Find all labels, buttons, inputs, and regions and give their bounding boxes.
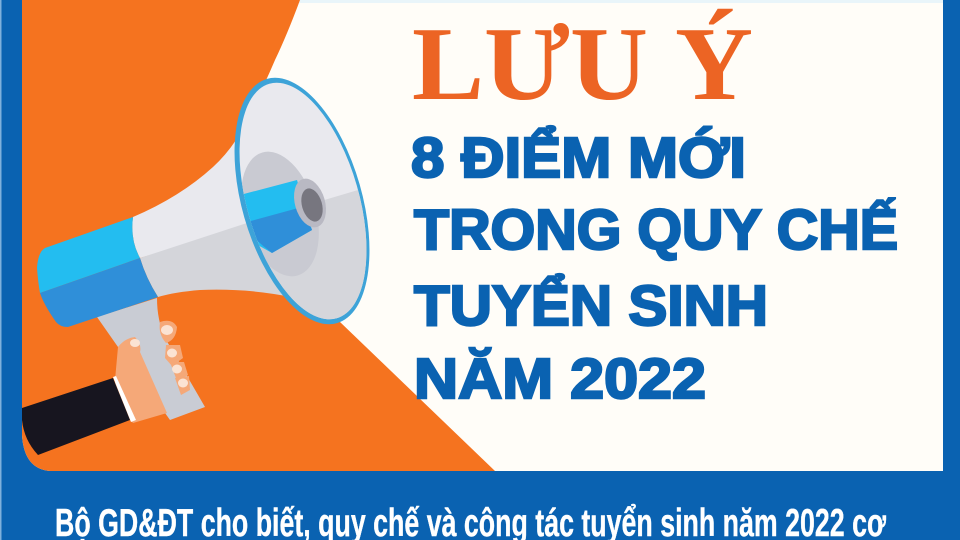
heading: 8 ĐIỂM MỚI: 8 ĐIỂM MỚI — [411, 125, 746, 190]
handle — [97, 298, 205, 420]
title: LƯU Ý: LƯU Ý — [412, 5, 753, 122]
hand — [115, 321, 190, 423]
megaphone rim and interior — [234, 78, 370, 324]
sleeve — [22, 376, 136, 455]
icon: megaphone with hand — [22, 78, 370, 455]
panel: orange speech beam — [22, 0, 495, 471]
megaphone body — [37, 140, 296, 327]
heading: TUYỂN SINH: TUYỂN SINH — [414, 273, 768, 338]
heading: NĂM 2022: NĂM 2022 — [414, 347, 706, 411]
heading: TRONG QUY CHẾ: TRONG QUY CHẾ — [414, 197, 898, 262]
